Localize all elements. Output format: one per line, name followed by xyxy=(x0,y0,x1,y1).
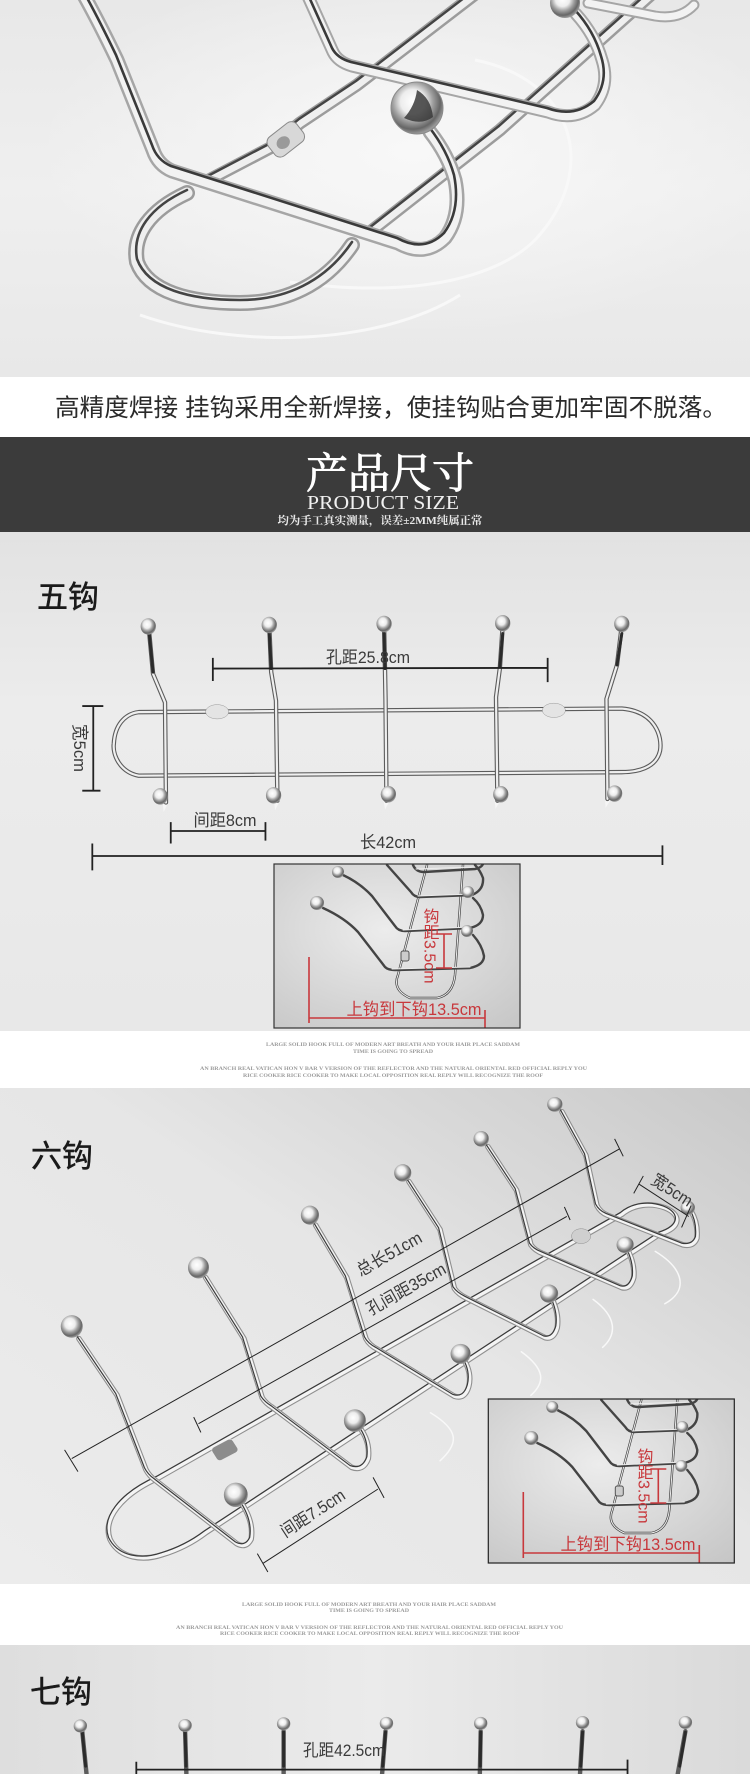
banner subtitle: PRODUCT SIZE xyxy=(307,492,459,514)
label: width: 宽5cm xyxy=(70,724,89,772)
fine print line 4: RICE COOKER RICE COOKER TO MAKE LOCAL OPPOSITION REAL REPLY WILL RECOGNIZE THE ROOF xyxy=(243,1073,544,1079)
hero chrome ball xyxy=(391,82,443,134)
fine print line 1: LARGE SOLID HOOK FULL OF MODERN ART BREATH AND YOUR HAIR PLACE SADDAM xyxy=(242,1602,497,1608)
label: hole spacing: 孔间距35cm xyxy=(363,1259,449,1319)
label: hook spacing: 间距7.5cm xyxy=(277,1486,349,1541)
fine print line 2: TIME IS GOING TO SPREAD xyxy=(329,1608,409,1614)
mounting plate xyxy=(264,119,307,160)
panel: hero close-up photo of welded hook xyxy=(0,0,750,377)
caption band xyxy=(0,377,750,437)
heading: seven hooks: 七钩 xyxy=(30,1675,92,1710)
fine print line 3: AN BRANCH REAL VATICAN HON V BAR V VERSION OF THE REFLECTOR AND THE NATURAL ORIENTAL RED OFFICIAL REPLY YOU xyxy=(200,1066,587,1072)
banner title: 产品尺寸 xyxy=(306,451,474,498)
section banner: product size xyxy=(0,437,750,532)
dimension lines xyxy=(82,658,662,870)
inset label: hook gap: 钩距3.5cm xyxy=(420,908,440,984)
heading: six hooks: 六钩 xyxy=(31,1139,93,1174)
label: hook spacing: 间距8cm xyxy=(194,811,256,830)
panel: seven-hook dimensions xyxy=(0,1645,750,1774)
fine print line 4: RICE COOKER RICE COOKER TO MAKE LOCAL OPPOSITION REAL REPLY WILL RECOGNIZE THE ROOF xyxy=(220,1631,521,1637)
six-hook rack photo xyxy=(61,1097,697,1558)
label: length: 长42cm xyxy=(360,833,416,852)
hero chrome rack and hooks xyxy=(81,0,694,338)
white band: fine print xyxy=(0,1584,750,1645)
seven-hook wires and balls xyxy=(74,1716,692,1774)
five-hook rack drawing xyxy=(114,615,660,812)
white band: fine print xyxy=(0,1031,750,1088)
inset label: hook gap: 钩距3.5cm xyxy=(634,1448,654,1524)
inset: side view of hook xyxy=(488,1397,734,1563)
label: total length: 总长51cm xyxy=(353,1228,425,1280)
inset: side view of hook xyxy=(274,862,520,1028)
fine print line 1: LARGE SOLID HOOK FULL OF MODERN ART BREATH AND YOUR HAIR PLACE SADDAM xyxy=(266,1042,521,1048)
label: width: 宽5cm xyxy=(648,1170,696,1211)
fine print line 3: AN BRANCH REAL VATICAN HON V BAR V VERSION OF THE REFLECTOR AND THE NATURAL ORIENTAL RED OFFICIAL REPLY YOU xyxy=(176,1625,563,1631)
fine print line 2: TIME IS GOING TO SPREAD xyxy=(353,1049,433,1055)
inset label: top to bottom hook: 上钩到下钩13.5cm xyxy=(346,1000,482,1019)
panel: six-hook dimensions xyxy=(0,1088,750,1584)
label: hole spacing: 孔距42.5cm xyxy=(303,1741,385,1760)
panel: five-hook dimensions xyxy=(0,532,750,1031)
angled dimension lines xyxy=(65,1139,691,1572)
banner note: 均为手工真实测量，误差±2MM纯属正常 xyxy=(278,513,482,527)
heading: five hooks: 五钩 xyxy=(37,580,99,615)
caption text: 高精度焊接 挂钩采用全新焊接，使挂钩贴合更加牢固不脱落。 xyxy=(55,394,727,422)
inset label: top to bottom hook: 上钩到下钩13.5cm xyxy=(560,1535,696,1554)
label: hole spacing: 孔距25.8cm xyxy=(326,648,410,667)
